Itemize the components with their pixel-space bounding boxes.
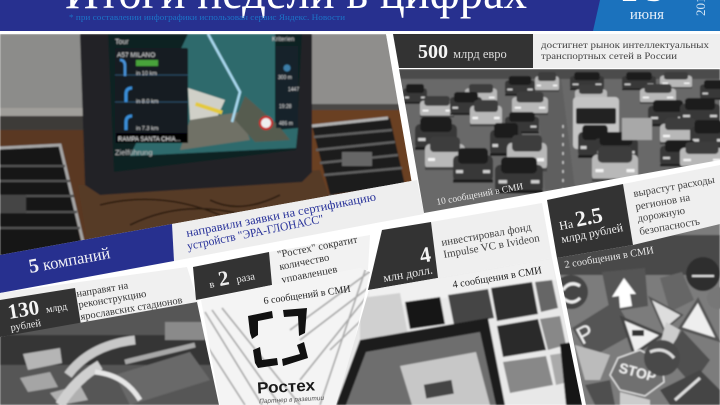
photo: car navigation display: A57 MILANO — [117, 52, 155, 59]
photo: stadium — [0, 300, 225, 405]
photo: car navigation display: in 8.0 km — [136, 99, 159, 105]
photo: car navigation display: Tour — [115, 39, 129, 46]
caption — [632, 174, 716, 238]
caption: количество — [278, 252, 330, 273]
photo: road signs: P — [572, 319, 599, 350]
grey caption — [623, 165, 720, 245]
number label: 4 — [418, 241, 433, 268]
grey caption — [431, 203, 552, 278]
photo: Ivideon screens — [330, 255, 590, 405]
date block — [593, 0, 720, 31]
dark label — [393, 34, 533, 68]
photo: car navigation display: 1447 — [288, 87, 299, 93]
photo: car navigation display: in 7.3 km — [136, 126, 159, 132]
photo: car navigation display: 486 m — [279, 121, 293, 127]
panel: 2.5 billion rubles — [547, 165, 720, 258]
panel: 130 billion rubles: рублей — [10, 318, 42, 334]
media count: 2 сообщения в СМИ — [564, 245, 655, 271]
number label: 130 млрд — [6, 290, 68, 324]
dark label — [0, 288, 81, 337]
photo: road signs — [550, 220, 720, 405]
header band — [0, 0, 720, 31]
caption: дорожную — [636, 205, 686, 225]
white separator under main photo — [386, 34, 425, 213]
panel: 2.5 billion rubles: млрд рублей — [560, 220, 625, 246]
caption text: достигнет рынок интеллектуальных — [541, 41, 709, 51]
caption: Impulse VC в Ivideon — [442, 232, 541, 261]
panel: 500 billion euro: транспортных сетей в России — [541, 51, 677, 62]
caption — [76, 280, 183, 323]
photo: car navigation display: 300 m — [278, 75, 292, 81]
panel: Rostec — [193, 235, 370, 300]
photo: car navigation display: RAMPA SANTA CHIA... — [118, 137, 181, 143]
screen bezel — [80, 34, 312, 195]
photo: road signs: STOP — [617, 359, 658, 385]
side info panel — [276, 46, 298, 128]
dark label — [547, 184, 633, 258]
route panel — [115, 48, 188, 143]
date block: июня — [630, 7, 664, 23]
panel: 500 billion euro — [393, 34, 720, 68]
photo: traffic jam — [390, 69, 720, 219]
tablet — [336, 318, 505, 405]
photo: car navigation display — [0, 34, 420, 260]
photo: Rostec logo — [201, 270, 370, 405]
blue label — [0, 224, 174, 293]
caption: управленцев — [280, 264, 338, 286]
grey caption — [533, 34, 720, 68]
number label: 500 млрд евро — [418, 41, 507, 63]
caption — [276, 235, 359, 286]
photo: car navigation display: 19:28 — [279, 104, 292, 110]
media count: Ivideon: 4 сообщения в СМИ — [452, 265, 543, 291]
grey caption — [269, 235, 370, 285]
panel: 5 companies: устройств "ЭРА-ГЛОНАСС" — [186, 211, 325, 253]
caption: вырастут расходы — [632, 174, 716, 200]
architectural lines — [204, 270, 370, 405]
caption: реконструкцию — [78, 289, 147, 311]
vent: left — [0, 145, 85, 260]
van — [573, 97, 619, 149]
grey caption — [0, 267, 198, 337]
footnote: * при составлении инфографики использован сервис Яндекс. Новости — [69, 13, 346, 22]
panel: 4 million dollars: млн долл. — [382, 262, 434, 285]
caption: направили заявки на сертификацию — [185, 189, 377, 240]
dark label — [193, 252, 272, 300]
photo: car navigation display: in 10 km — [136, 71, 157, 77]
number label: в2 раза — [206, 260, 257, 293]
caption: ярославских стадионов — [80, 295, 183, 323]
number label: На 2.5 — [556, 202, 605, 235]
media count: Rostec: 6 сообщений в СМИ — [263, 284, 351, 307]
logo wordmark: Ростех — [257, 377, 316, 397]
caption: "Ростех" сократит — [276, 235, 359, 261]
caption: инвестировал фонд — [440, 221, 533, 249]
photo: car navigation display: Zielführung — [115, 148, 153, 157]
caption: направят на — [76, 280, 129, 300]
panel: 130 billion rubles — [0, 267, 198, 337]
caption: безопасность — [638, 216, 701, 238]
logo mark — [248, 308, 308, 368]
media count: 10 сообщений в СМИ — [436, 181, 524, 208]
grey caption strip — [172, 180, 424, 261]
photo: car navigation display: Kriterien — [272, 37, 294, 43]
panel: 4 million dollars — [368, 203, 552, 290]
vent: right — [312, 118, 405, 195]
caption: регионов на — [634, 191, 691, 213]
panel: 5 companies — [0, 180, 424, 293]
number label: 5 компаний — [27, 241, 112, 278]
dark label — [368, 222, 438, 290]
map — [130, 34, 298, 156]
